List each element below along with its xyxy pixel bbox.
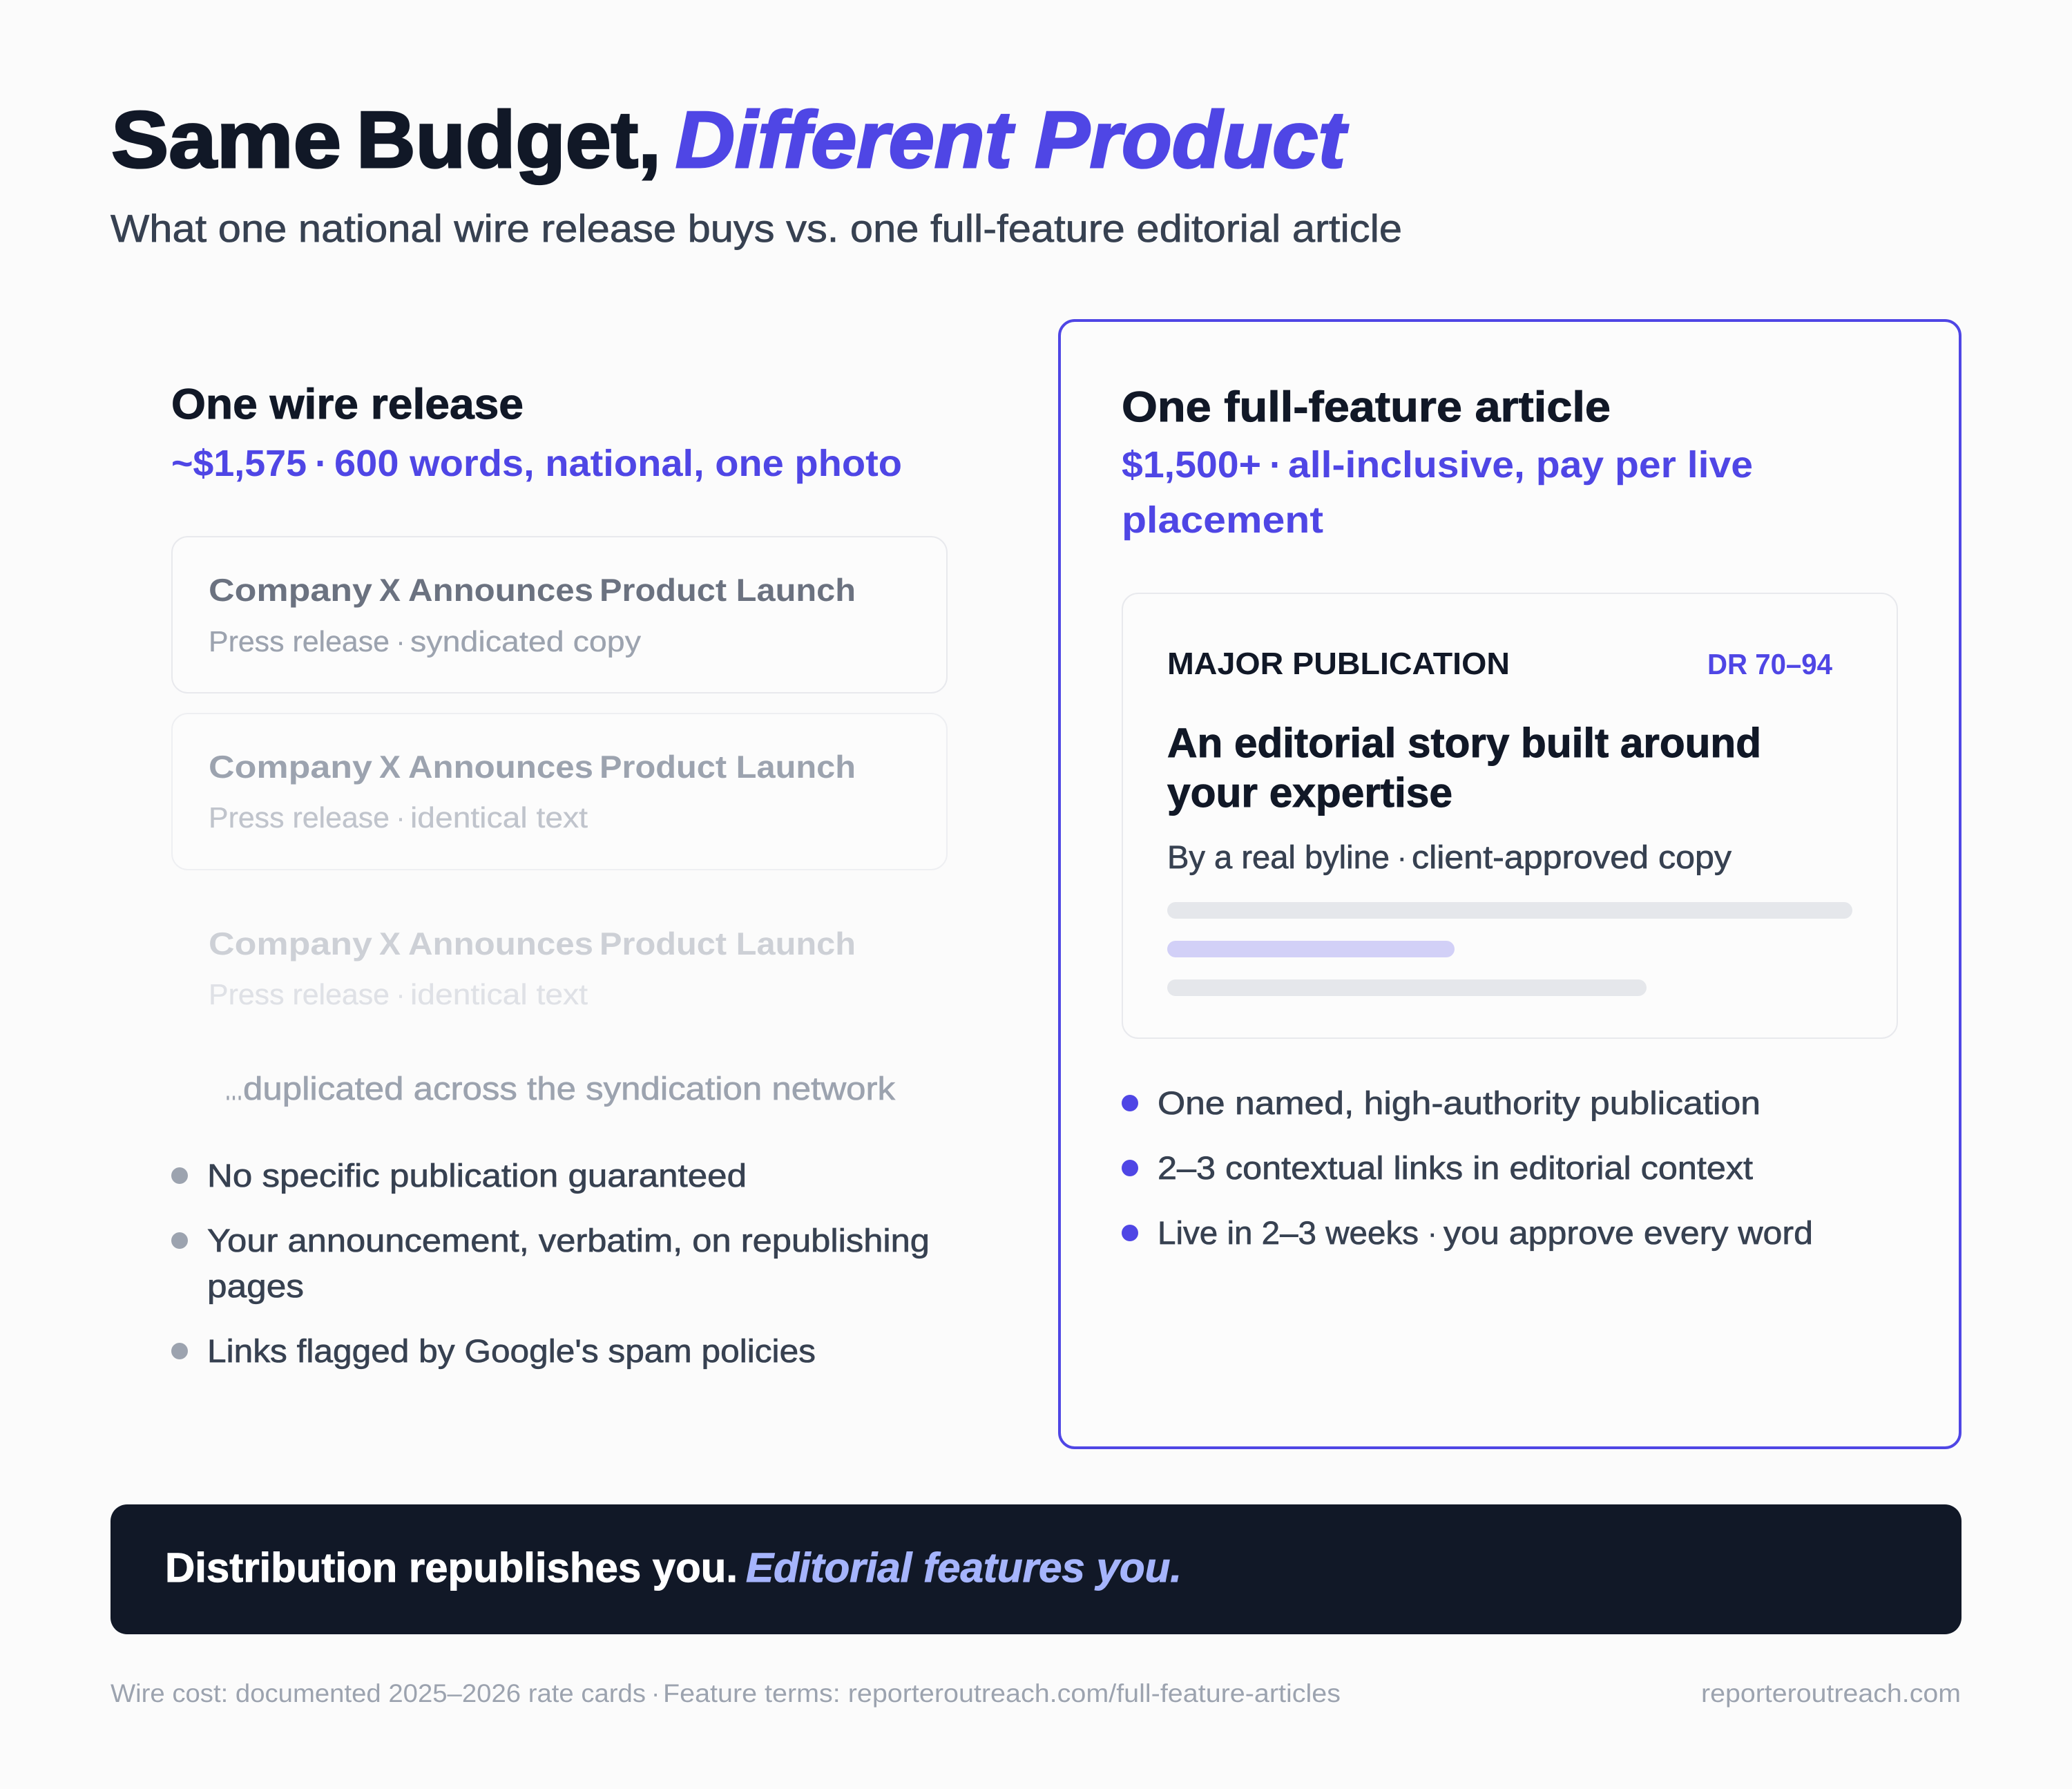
wire bullet 2: Your announcement, verbatim, on republishing <box>207 1222 930 1259</box>
takeaway banner: Editorial features you. <box>746 1544 1182 1591</box>
feature price line: · <box>1269 444 1282 486</box>
wire bullet 2 <box>171 1222 930 1304</box>
press release card 3: Announces <box>408 926 593 962</box>
footer site name: reporteroutreach.com <box>1701 1679 1961 1707</box>
article headline: An editorial story built around <box>1167 720 1761 766</box>
press release card 3: identical text <box>410 978 588 1011</box>
feature price line: all-inclusive, pay per live <box>1288 444 1753 486</box>
feature bullet 1: One named, high-authority publication <box>1158 1084 1761 1121</box>
press release card 2: identical text <box>410 801 588 834</box>
feature bullet 3: · <box>1427 1214 1438 1251</box>
article headline <box>1167 720 1761 816</box>
press release card 1: X <box>379 572 401 608</box>
wire bullet 2: pages <box>207 1267 304 1304</box>
wire bullet 3: Links flagged by Google's spam policies <box>207 1332 816 1369</box>
placeholder text lines <box>1167 902 1852 996</box>
feature bullet 3: Live in 2–3 weeks <box>1158 1214 1419 1251</box>
wire price line: ~$1,575 <box>171 443 307 484</box>
byline: By a real byline <box>1167 839 1390 875</box>
subtitle: What one national wire release buys vs. one full-feature editorial article <box>111 207 1402 250</box>
press release card 1: Company <box>209 572 372 608</box>
press release card 2: Announces <box>408 749 593 785</box>
press release card 1: Press release <box>209 625 390 658</box>
press release card 1 <box>172 537 947 693</box>
feature price line <box>1122 444 1753 541</box>
press release card 2 <box>172 714 947 870</box>
wire price line: · <box>315 443 327 484</box>
byline: client-approved copy <box>1412 839 1732 875</box>
press release card 2: Product Launch <box>599 749 856 785</box>
byline <box>1167 839 1732 875</box>
title: Budget, <box>356 95 661 184</box>
source footnote: · <box>651 1679 660 1707</box>
press release card 1: syndicated copy <box>410 625 641 658</box>
press release card 3: X <box>379 926 401 962</box>
feature bullet 3: you approve every word <box>1443 1214 1813 1251</box>
feature bullet 3 <box>1122 1214 1813 1251</box>
press release card 2: Press release <box>209 801 390 834</box>
takeaway banner <box>111 1504 1961 1634</box>
press release card 3 <box>209 926 856 1011</box>
panel: one wire release <box>171 381 947 1369</box>
source footnote: Wire cost: documented 2025–2026 rate cards <box>111 1679 646 1707</box>
article headline: your expertise <box>1167 769 1452 816</box>
press release card 1: Announces <box>408 572 593 608</box>
title: Same <box>111 95 341 184</box>
title <box>111 95 1348 184</box>
source footnote <box>111 1679 1341 1707</box>
domain rating: DR 70–94 <box>1707 648 1833 680</box>
wire heading: One wire release <box>171 381 524 428</box>
press release card 2: Company <box>209 749 372 785</box>
byline: · <box>1397 839 1408 875</box>
panel: one full-feature article <box>1059 321 1960 1448</box>
feature price line: $1,500+ <box>1122 444 1261 486</box>
syndication note: … <box>224 1070 243 1107</box>
title: Different Product <box>675 95 1348 184</box>
feature bullet 2: 2–3 contextual links in editorial context <box>1158 1149 1753 1186</box>
press release card 1: · <box>396 625 405 658</box>
source footnote: Feature terms: reporteroutreach.com/full-feature-articles <box>663 1679 1341 1707</box>
press release card 3: Company <box>209 926 372 962</box>
feature price line: placement <box>1122 499 1323 541</box>
publication name: MAJOR PUBLICATION <box>1167 646 1510 681</box>
press release card 3: Press release <box>209 978 390 1011</box>
wire bullet 1: No specific publication guaranteed <box>207 1157 747 1194</box>
press release card 2: · <box>396 801 405 834</box>
syndication note: duplicated across the syndication network <box>243 1070 896 1107</box>
wire price line: 600 words, national, one photo <box>334 443 902 484</box>
press release card 3: Product Launch <box>599 926 856 962</box>
publication card <box>1122 593 1897 1038</box>
press release card 3: · <box>396 978 405 1011</box>
press release card 2: X <box>379 749 401 785</box>
takeaway banner: Distribution republishes you. <box>165 1544 738 1591</box>
press release card 1: Product Launch <box>599 572 856 608</box>
feature heading: One full-feature article <box>1122 383 1611 431</box>
